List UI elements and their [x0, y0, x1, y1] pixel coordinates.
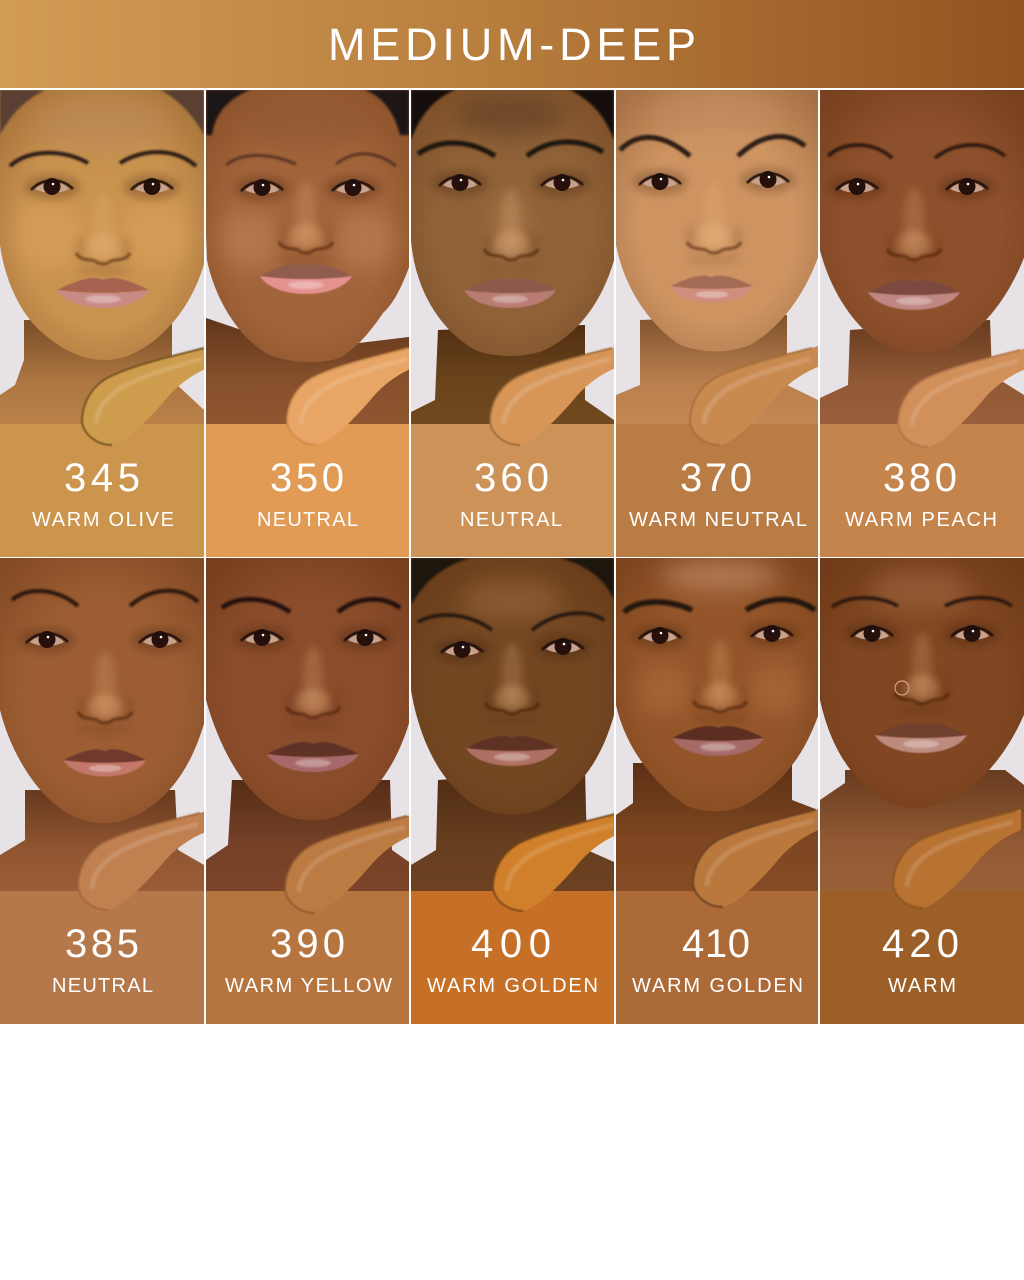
number 420: 420 — [882, 922, 959, 966]
panel: shade 360 neutral — [405, 90, 620, 557]
number 400: 400 — [471, 922, 551, 966]
tone name: WARM PEACH — [845, 509, 997, 531]
panel: shade 400 warm golden — [405, 558, 621, 1024]
label band 350 — [206, 424, 409, 557]
label band 360 — [411, 424, 614, 557]
number 410: 410 — [682, 922, 750, 966]
portrait 385 — [0, 558, 210, 891]
portrait 410 — [610, 558, 825, 891]
tone name: WARM NEUTRAL — [629, 509, 807, 531]
panel: shade 345 warm olive — [0, 90, 210, 557]
swatch 345 — [82, 346, 210, 445]
number 360: 360 — [474, 456, 549, 500]
swatch 360 — [490, 346, 618, 445]
portrait 370 — [610, 90, 825, 424]
panel: shade 390 warm yellow — [200, 558, 415, 1024]
swatch 350 — [287, 346, 415, 445]
number 385: 385 — [65, 922, 139, 966]
portrait 380 — [815, 90, 1024, 424]
number 390: 390 — [270, 922, 345, 966]
number 370: 370 — [680, 456, 752, 500]
portrait 345 — [0, 90, 210, 424]
panel: shade 420 warm — [815, 558, 1024, 1024]
swatch 410 — [693, 808, 821, 907]
label band 400 — [411, 891, 614, 1024]
panel: shade 410 warm golden — [610, 558, 825, 1024]
tone name: WARM GOLDEN — [427, 975, 598, 997]
title: MEDIUM-DEEP — [328, 19, 696, 70]
portrait 420 — [815, 558, 1024, 891]
portrait 400 — [405, 558, 620, 891]
swatch 385 — [78, 811, 206, 910]
label band 420 — [820, 891, 1024, 1024]
label band 410 — [616, 891, 818, 1024]
portrait 350 — [200, 90, 415, 424]
swatch 370 — [690, 346, 818, 445]
swatch 390 — [285, 814, 413, 913]
swatch 380 — [898, 348, 1024, 447]
portrait 360 — [405, 90, 620, 424]
portrait 390 — [200, 558, 415, 891]
number 380: 380 — [883, 456, 957, 500]
label band 390 — [206, 891, 409, 1024]
tone name: NEUTRAL — [52, 975, 153, 997]
tone name: WARM OLIVE — [32, 509, 174, 531]
label band 385 — [0, 891, 204, 1024]
label band 345 — [0, 424, 204, 557]
header banner — [0, 0, 1024, 88]
panel: shade 380 warm peach — [815, 90, 1024, 557]
number 350: 350 — [270, 456, 344, 500]
tone name: WARM GOLDEN — [632, 975, 803, 997]
panel: shade 350 neutral — [200, 90, 415, 557]
label band 380 — [820, 424, 1024, 557]
panel: shade 385 neutral — [0, 558, 210, 1024]
label band 370 — [616, 424, 818, 557]
tone name: WARM — [888, 975, 956, 997]
tone name: WARM YELLOW — [225, 975, 392, 997]
number 345: 345 — [64, 456, 140, 500]
swatch 420 — [893, 809, 1021, 908]
tone name: NEUTRAL — [460, 509, 562, 531]
swatch 400 — [493, 812, 621, 911]
panel: shade 370 warm neutral — [610, 90, 825, 557]
tone name: NEUTRAL — [257, 509, 358, 531]
